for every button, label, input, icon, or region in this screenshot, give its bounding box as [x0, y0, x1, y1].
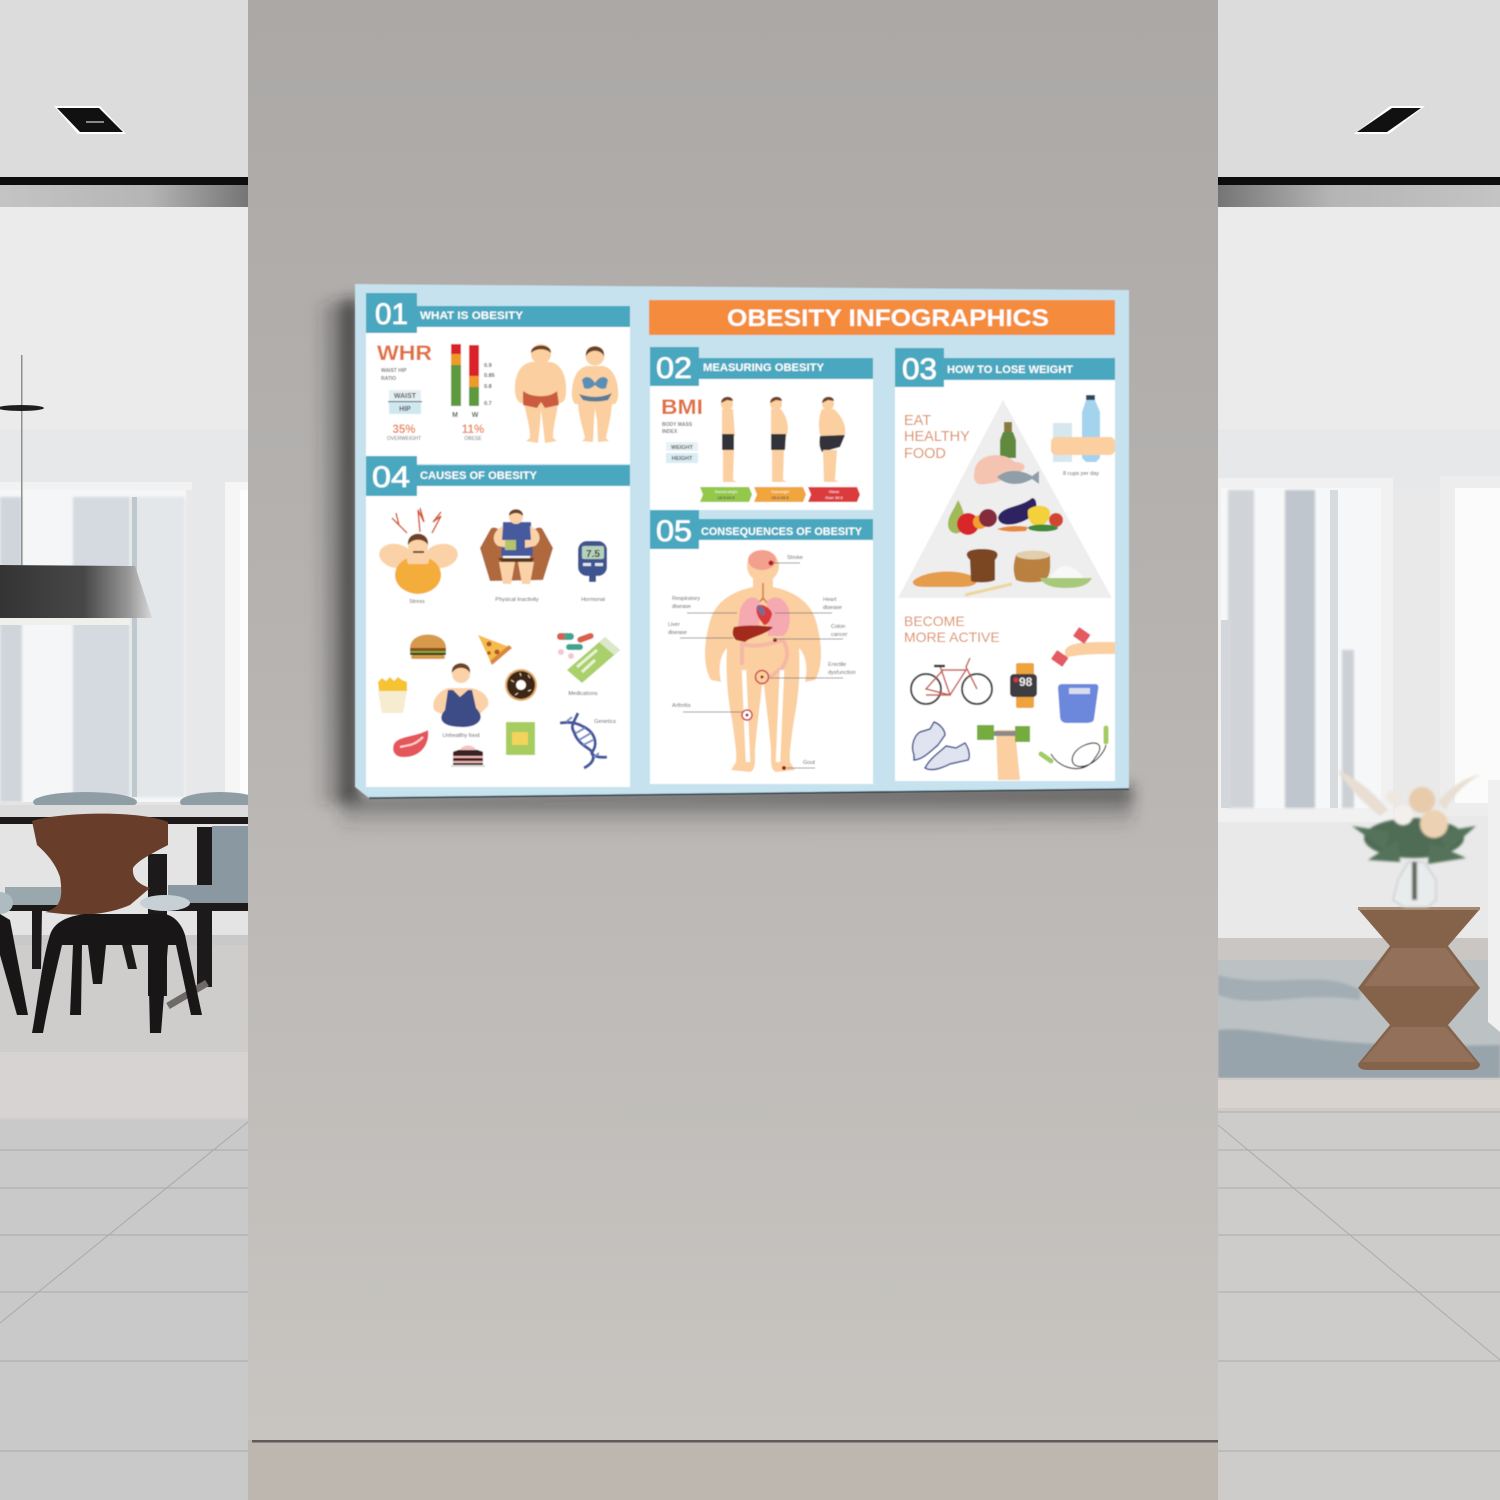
WHR bar chart: W	[472, 412, 479, 419]
icon: eggplant	[998, 498, 1036, 525]
icon: cake	[451, 746, 485, 767]
icon: jump rope	[1041, 728, 1106, 769]
icon: glucose meter	[578, 541, 607, 603]
WHR bar chart	[451, 344, 495, 419]
body anatomy diagram	[668, 550, 856, 772]
flower vase bouquet	[1337, 770, 1481, 907]
icon: water glass and bottle	[1051, 395, 1115, 477]
icon: donut	[505, 669, 537, 701]
EAT HEALTHY FOOD text: HEALTHY	[904, 429, 970, 445]
icon: greens	[1028, 524, 1058, 532]
icon: overweight man profile	[770, 397, 788, 482]
anatomy labels: cancer	[831, 632, 848, 638]
BMI range arrows: 25.0-29.9	[772, 495, 789, 500]
BMI range arrows: Overweight	[771, 490, 789, 494]
window left	[0, 482, 248, 812]
icon: baguette	[913, 572, 977, 587]
panel: 04 causes of obesity	[366, 456, 630, 787]
leader lines	[680, 563, 843, 768]
panel: 05 consequences of obesity	[650, 510, 873, 784]
heading 02: 02	[656, 352, 692, 385]
icon: plum	[979, 509, 997, 527]
main title	[649, 300, 1115, 335]
icon: obese woman	[572, 346, 618, 442]
icon: fries	[378, 677, 407, 713]
WHR text block	[377, 342, 484, 442]
anatomy labels: Heart	[823, 597, 837, 603]
canvas base	[355, 284, 1129, 798]
BMI text block: WEIGHT	[671, 445, 694, 451]
BMI text block: BODY MASS	[662, 422, 693, 428]
WHR text block: WHR	[377, 342, 432, 365]
icon: stress man	[377, 508, 460, 605]
floor left	[0, 935, 248, 1500]
left room background	[0, 0, 260, 1500]
icon: carrot	[997, 526, 1028, 532]
heading 04	[366, 456, 630, 496]
anatomy labels: Colon	[831, 624, 845, 630]
BMI text block: INDEX	[662, 429, 678, 435]
heading 03: 03	[902, 353, 937, 386]
icon: orange	[973, 515, 987, 529]
heading 02: MEASURING OBESITY	[703, 362, 825, 374]
anatomy labels	[668, 555, 856, 766]
dining table and back chairs	[0, 792, 260, 1006]
icon: pizza	[478, 635, 512, 665]
icon: normal man profile	[721, 397, 737, 482]
icon: fish	[997, 471, 1039, 484]
WHR text block: OBESE	[464, 436, 482, 442]
icon: smart watch	[1010, 663, 1037, 708]
WHR bar chart: M	[452, 412, 458, 419]
WHR bar chart: 0.9	[484, 363, 492, 369]
caption: stress: Stress	[409, 599, 425, 605]
icon: green dumbbell arm	[977, 725, 1030, 780]
heading 04: CAUSES OF OBESITY	[420, 470, 538, 482]
BMI text block: HEIGHT	[672, 456, 693, 462]
caption: medications: Medications	[568, 691, 598, 697]
WHR bar chart: 0.7	[484, 401, 492, 407]
icon: steak	[393, 730, 428, 757]
icon: pear	[948, 500, 964, 533]
BMI range arrows	[700, 487, 860, 502]
caption: unhealthy food: Unhealthy food	[442, 733, 480, 739]
icon: apple	[957, 513, 979, 535]
WHR text block: HIP	[399, 406, 411, 413]
icon: wheat	[965, 584, 1012, 595]
ceiling spotlight left	[54, 106, 126, 134]
panel: 01 what is obesity	[366, 293, 630, 464]
icon: woman eating	[433, 663, 488, 739]
pendant lamp	[0, 355, 152, 625]
anatomy labels: dysfunction	[828, 670, 856, 676]
heading 01	[366, 293, 630, 333]
WHR bar chart: 0.8	[484, 384, 492, 390]
icon: obese man	[515, 344, 566, 443]
icon: rice bowl	[1040, 566, 1092, 588]
sofa	[1488, 780, 1500, 1032]
WHR text block: WAIST HIP	[381, 368, 407, 374]
floor strip below wall	[248, 1440, 1218, 1500]
panel: 03 how to lose weight	[895, 348, 1115, 781]
heading 05	[650, 510, 873, 549]
heading 01: WHAT IS OBESITY	[420, 310, 524, 322]
food pyramid	[898, 400, 1112, 598]
icon: pepper	[1028, 506, 1050, 526]
WHR text block: 11%	[462, 424, 484, 436]
anatomy labels: disease	[672, 604, 691, 610]
anatomy labels: Respiratory	[672, 596, 700, 602]
right room background	[1218, 0, 1500, 1500]
icon: bathroom scale	[1058, 684, 1098, 723]
icon: sneakers	[913, 722, 969, 770]
icon: obese man profile	[819, 397, 845, 482]
caption: water: 8 cups per day	[1063, 471, 1099, 477]
main title: OBESITY INFOGRAPHICS	[727, 305, 1049, 332]
anatomy labels: Stroke	[787, 555, 803, 561]
icon: chips bag	[506, 722, 535, 755]
icon: tomato	[1049, 513, 1063, 527]
icon: burger	[410, 634, 446, 659]
icon: bicycle	[911, 658, 992, 704]
heading 03: HOW TO LOSE WEIGHT	[947, 364, 1073, 376]
icon: smart watch: 98	[1019, 675, 1033, 689]
EAT HEALTHY FOOD text: EAT	[904, 413, 931, 429]
central wall	[248, 0, 1218, 1440]
icon: man in armchair	[480, 509, 553, 603]
BMI range arrows: Obese	[829, 490, 839, 494]
heading 02	[650, 347, 873, 386]
anatomy labels: Liver	[668, 622, 680, 628]
icon: glucose meter: 7.5	[586, 549, 600, 560]
anatomy labels: Erectile	[828, 662, 846, 668]
heading 01: 01	[375, 298, 408, 331]
EAT HEALTHY FOOD text: FOOD	[904, 446, 946, 462]
heading 04: 04	[372, 461, 410, 494]
WHR text block: WAIST	[394, 393, 417, 400]
heading 05: CONSEQUENCES OF OBESITY	[701, 526, 863, 538]
ceiling spotlight right	[1354, 106, 1425, 134]
window right	[1218, 476, 1500, 823]
icon: chicken	[974, 455, 1025, 484]
icon: DNA helix	[560, 713, 616, 768]
caption: physical inactivity: Physical Inactivity	[495, 597, 539, 603]
icon: oil bottle	[1000, 422, 1016, 458]
icon: medications	[557, 632, 620, 697]
WHR text block: OVERWEIGHT	[387, 436, 421, 442]
BMI range arrows: Normal weight	[715, 490, 737, 494]
canvas shadow	[315, 298, 1133, 838]
icon: grain sack	[1014, 551, 1050, 582]
wooden dining chair	[0, 814, 202, 1033]
BMI text block: BMI	[661, 396, 703, 419]
BMI range arrows: Over 30.0	[825, 495, 844, 500]
panel: 02 measuring obesity	[650, 347, 873, 510]
anatomy labels: disease	[823, 605, 842, 611]
side table	[1358, 907, 1480, 1070]
BECOME MORE ACTIVE text: MORE ACTIVE	[904, 629, 1000, 645]
EAT HEALTHY FOOD text	[904, 413, 970, 462]
anatomy labels: disease	[668, 630, 687, 636]
icon: toast	[967, 549, 998, 582]
caption: hormonal: Hormonal	[581, 597, 605, 603]
caption: genetics: Genetics	[594, 719, 616, 725]
WHR text block: 35%	[392, 424, 416, 436]
WHR bar chart: 0.85	[484, 373, 495, 379]
BMI text block	[661, 396, 703, 463]
WHR text block: RATIO	[381, 376, 396, 382]
icon: red dumbbell arm	[1051, 627, 1115, 667]
BECOME MORE ACTIVE text	[904, 613, 1000, 645]
heading 05: 05	[656, 515, 692, 548]
BMI range arrows: 18.5-24.9	[718, 495, 735, 500]
anatomy labels: Arthritis	[672, 703, 691, 709]
infographic canvas	[355, 284, 1129, 798]
heading 03	[895, 348, 1115, 387]
floor and rug right	[1218, 938, 1500, 1500]
anatomy labels: Gout	[803, 760, 815, 766]
BECOME MORE ACTIVE text: BECOME	[904, 613, 965, 629]
